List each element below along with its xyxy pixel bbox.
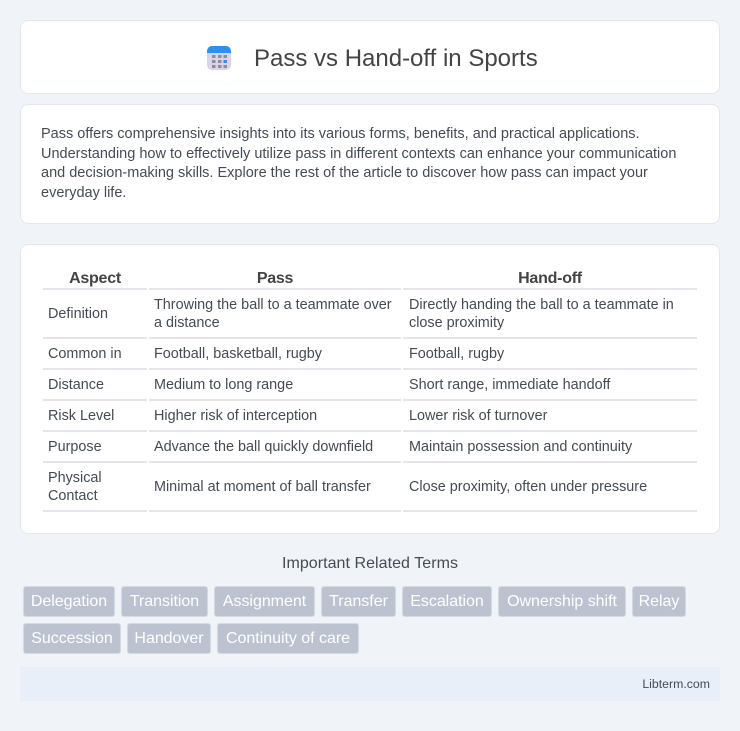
row: Physical Contact: Contact <box>48 488 98 504</box>
tag <box>23 623 121 654</box>
row: Purpose <box>43 439 697 463</box>
intro text: and decision-making skills. Explore the rest of the article to discover how pass can impact your <box>41 165 648 181</box>
table header: Pass <box>257 270 293 287</box>
row: Risk Level <box>43 408 697 432</box>
row: Common in: Football, rugby <box>409 346 504 362</box>
row: Purpose: Purpose <box>48 439 102 455</box>
row: Risk Level: Risk Level <box>48 408 114 424</box>
tag: Succession <box>31 630 113 647</box>
intro text: Pass offers comprehensive insights into its various forms, benefits, and practical applications. <box>41 126 640 142</box>
tag: Continuity of care <box>226 630 350 647</box>
row: Common in <box>43 346 697 370</box>
tag: Relay <box>639 593 679 610</box>
tag <box>217 623 359 654</box>
row: Definition: a distance <box>154 315 220 331</box>
tag: Assignment <box>223 593 306 610</box>
tag: Ownership shift <box>507 593 617 610</box>
tag: Transfer <box>329 593 388 610</box>
comparison table <box>43 270 697 512</box>
footer source: Libterm.com <box>642 677 710 691</box>
tag: Transition <box>130 593 199 610</box>
intro text panel <box>20 104 720 224</box>
tag <box>127 623 211 654</box>
title card <box>20 20 720 94</box>
table header <box>43 270 697 290</box>
tag <box>23 586 115 617</box>
row: Purpose: Advance the ball quickly downfield <box>154 439 373 455</box>
row: Distance: Distance <box>48 377 104 393</box>
tag: Delegation <box>31 593 107 610</box>
row: Definition: Directly handing the ball to a teammate in <box>409 297 674 313</box>
tag <box>402 586 492 617</box>
row: Distance: Short range, immediate handoff <box>409 377 610 393</box>
row: Definition: Throwing the ball to a teammate over <box>154 297 392 313</box>
row: Distance: Medium to long range <box>154 377 293 393</box>
related terms heading: Important Related Terms <box>282 555 458 572</box>
row: Purpose: Maintain possession and continuity <box>409 439 632 455</box>
row: Definition <box>43 297 697 339</box>
icon: calendar <box>207 46 231 70</box>
row: Common in: Common in <box>48 346 122 362</box>
row: Definition: close proximity <box>409 315 504 331</box>
comparison table panel <box>20 244 720 534</box>
tag <box>214 586 315 617</box>
table header: Hand-off <box>518 270 582 287</box>
row: Physical Contact <box>43 470 697 512</box>
related term tags <box>23 586 686 654</box>
row: Physical Contact: Physical <box>48 470 102 486</box>
footer <box>20 667 720 701</box>
table header: Aspect <box>69 270 121 287</box>
intro text: Understanding how to effectively utilize pass in different contexts can enhance your communication <box>41 146 676 162</box>
tag: Escalation <box>410 593 484 610</box>
tag: Handover <box>134 630 204 647</box>
row: Risk Level: Higher risk of interception <box>154 408 317 424</box>
row: Risk Level: Lower risk of turnover <box>409 408 547 424</box>
row: Common in: Football, basketball, rugby <box>154 346 322 362</box>
tag <box>121 586 208 617</box>
title: Pass vs Hand-off in Sports <box>254 45 538 72</box>
row: Physical Contact: Close proximity, often under pressure <box>409 479 647 495</box>
tag <box>498 586 626 617</box>
row: Physical Contact: Minimal at moment of ball transfer <box>154 479 371 495</box>
tag <box>321 586 396 617</box>
intro text <box>41 126 676 201</box>
row: Definition: Definition <box>48 306 108 322</box>
tag <box>632 586 686 617</box>
intro text: everyday life. <box>41 185 126 201</box>
row: Distance <box>43 377 697 401</box>
